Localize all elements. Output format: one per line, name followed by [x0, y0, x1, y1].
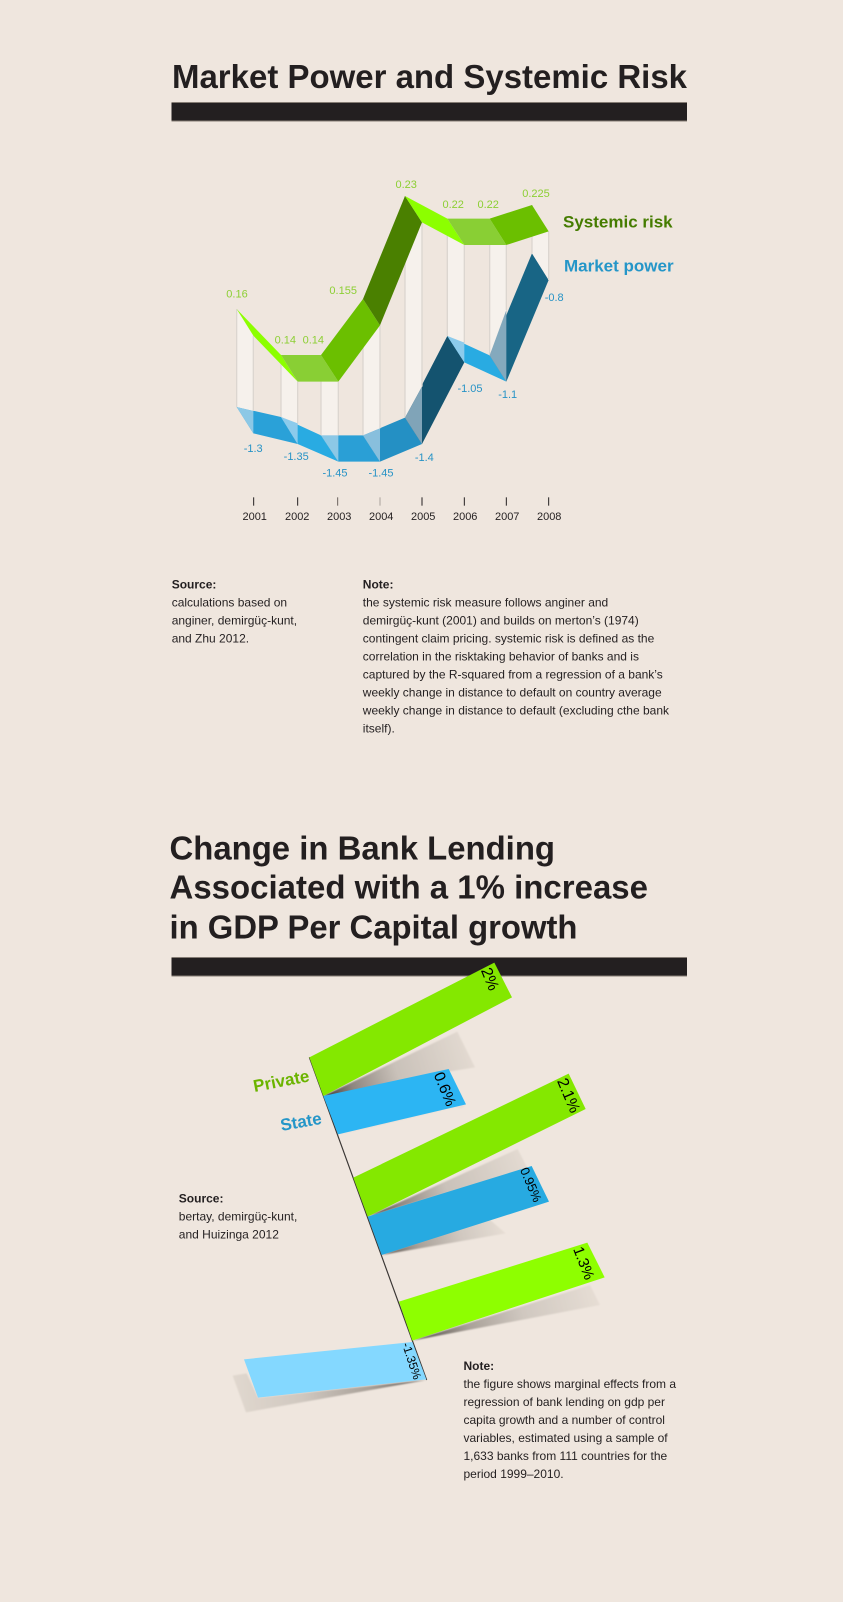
source text bottom	[179, 1192, 297, 1242]
label: private: Private	[252, 1066, 311, 1096]
state bar -1.35%	[244, 1342, 426, 1398]
note text bottom: period 1999–2010.	[464, 1467, 564, 1481]
systemic risk values: 0.23	[395, 179, 417, 191]
bar value labels: 1.3%	[569, 1244, 597, 1282]
source text bottom: bertay, demirgüç-kunt,	[179, 1210, 297, 1224]
year labels: 2003	[327, 511, 351, 523]
note text top: demirgüç-kunt (2001) and builds on merton’s (1974)	[363, 613, 639, 627]
bar value labels: 0.6%	[430, 1070, 459, 1109]
label: state: State	[279, 1109, 323, 1135]
systemic risk values: 0.22	[477, 199, 499, 211]
note text bottom: capita growth and a number of control	[464, 1413, 665, 1427]
source text top	[172, 577, 297, 645]
white vertical panels	[237, 196, 549, 435]
state bar 0.95%	[368, 1166, 549, 1255]
note text top: weekly change in distance to default on country average	[362, 685, 662, 699]
private bar 1.3%	[399, 1243, 605, 1341]
heading bar top	[172, 102, 687, 122]
chart geometry	[237, 196, 549, 506]
bar value labels: 2.1%	[553, 1076, 583, 1116]
source text top: anginer, demirgüç-kunt,	[172, 613, 297, 627]
systemic risk values: 0.14	[303, 334, 324, 346]
systemic risk values: 0.22	[442, 199, 464, 211]
year labels: 2006	[453, 511, 477, 523]
chart: systemic risk and market power ribbon	[226, 179, 564, 523]
source text bottom: and Huizinga 2012	[179, 1228, 279, 1242]
note text top: the systemic risk measure follows anginer and	[363, 595, 608, 609]
year labels: 2005	[411, 511, 435, 523]
source text top: calculations based on	[172, 595, 287, 609]
state bar 0.6%	[323, 1069, 466, 1134]
year labels: 2004	[369, 511, 393, 523]
systemic risk values: 0.14	[275, 334, 296, 346]
year labels: 2007	[495, 511, 519, 523]
bar value labels: -1.35%	[399, 1341, 424, 1382]
title: market power and systemic risk: Market Power and Systemic Risk	[172, 58, 688, 95]
market power values: -1.45	[368, 468, 394, 480]
title: change in bank lending	[170, 829, 648, 945]
note text top: correlation in the risktaking behavior of banks and is	[363, 649, 639, 663]
year labels: 2008	[537, 511, 561, 523]
panel edges	[237, 196, 549, 435]
year ticks	[254, 497, 549, 506]
lower bars	[233, 1243, 605, 1412]
private bar 2.1%	[353, 1074, 586, 1217]
market power values: -1.1	[498, 389, 517, 401]
note text bottom: regression of bank lending on gdp per	[464, 1395, 665, 1409]
note text top: Note:	[363, 577, 393, 591]
source text top: Source:	[172, 577, 216, 591]
systemic risk values	[226, 179, 550, 346]
bar value labels: 2%	[477, 965, 502, 993]
year labels: 2002	[285, 511, 309, 523]
bar value labels	[399, 965, 597, 1382]
note text bottom	[464, 1359, 676, 1481]
note text top: captured by the R-squared from a regression of a bank’s	[363, 667, 663, 681]
private bar 2%	[309, 963, 512, 1096]
note text top: weekly change in distance to default (excluding cthe bank	[362, 703, 670, 717]
note text bottom: variables, estimated using a sample of	[464, 1431, 668, 1445]
market power values: -1.05	[457, 383, 483, 395]
year labels	[242, 511, 561, 523]
market power values	[244, 292, 564, 480]
title: change in bank lending: Change in Bank Lending	[170, 829, 555, 866]
note text top: contingent claim pricing. systemic risk is defined as the	[363, 631, 655, 645]
systemic risk values: 0.225	[522, 188, 550, 200]
year labels: 2001	[242, 511, 267, 523]
source text top: and Zhu 2012.	[172, 631, 249, 645]
axis	[309, 1057, 427, 1380]
legend: systemic risk: Systemic risk	[563, 212, 673, 232]
market power values: -0.8	[545, 292, 564, 304]
note text top	[362, 577, 670, 735]
note text top: itself).	[363, 721, 395, 735]
legend: market power: Market power	[564, 256, 674, 276]
shadows upper	[323, 1032, 528, 1255]
note text bottom: the figure shows marginal effects from a	[464, 1377, 676, 1391]
market power values: -1.4	[415, 452, 434, 464]
title: change in bank lending: in GDP Per Capital growth	[170, 908, 578, 945]
market power values: -1.45	[322, 468, 348, 480]
bar value labels: 0.95%	[517, 1165, 545, 1204]
blue market power ribbon	[237, 253, 549, 462]
translucent fold wedges	[237, 310, 506, 462]
title: change in bank lending: Associated with a 1% increase	[170, 869, 648, 906]
note text bottom: 1,633 banks from 111 countries for the	[464, 1449, 667, 1463]
green systemic risk ribbon	[237, 196, 549, 382]
shadows lower	[233, 1285, 600, 1412]
upper bars	[309, 963, 586, 1380]
systemic risk values: 0.16	[226, 288, 248, 300]
heading bar bottom	[172, 957, 687, 976]
note text bottom: Note:	[464, 1359, 494, 1373]
systemic risk values: 0.155	[329, 285, 357, 297]
market power values: -1.35	[284, 451, 309, 463]
chart: bank lending bars	[233, 963, 605, 1412]
source text bottom: Source:	[179, 1192, 223, 1206]
market power values: -1.3	[244, 443, 263, 455]
